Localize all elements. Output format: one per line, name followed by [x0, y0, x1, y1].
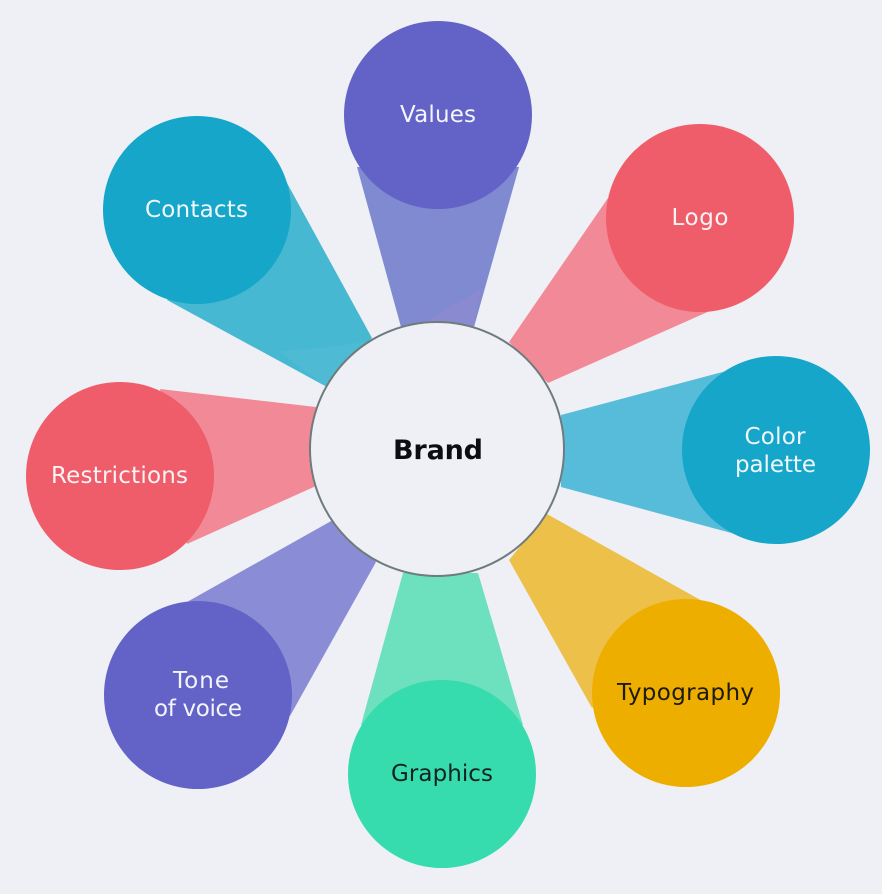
center hub: brand: [310, 322, 564, 576]
heading: brand: Brand: [393, 435, 483, 466]
circle: graphics: [348, 680, 536, 868]
circle: logo: [606, 124, 794, 312]
label: graphics: Graphics: [391, 761, 493, 787]
label: contacts: Contacts: [145, 197, 248, 223]
circle: color palette: [682, 356, 870, 544]
beam: logo: [509, 198, 712, 383]
circle: tone of voice: [104, 601, 292, 789]
beam: typography: [509, 514, 704, 708]
beam: color palette: [561, 370, 735, 534]
beam: restrictions: [160, 389, 316, 544]
label: values: Values: [400, 102, 476, 128]
label: typography: Typography: [616, 680, 754, 706]
label: tone of voice: [154, 668, 242, 722]
circle: values: [344, 21, 532, 209]
beam: values: [357, 167, 519, 327]
label: color palette: Color: [744, 424, 806, 450]
beam: tone of voice: [187, 520, 376, 716]
label: tone of voice: Tone: [172, 668, 229, 694]
circle: typography: [592, 599, 780, 787]
label: restrictions: Restrictions: [51, 463, 188, 489]
label: tone of voice: of voice: [154, 696, 242, 722]
label: logo: Logo: [672, 205, 728, 231]
beam: graphics: [361, 573, 523, 725]
circle: restrictions: [26, 382, 214, 570]
circle: contacts: [103, 116, 291, 304]
beam: contacts: [167, 183, 372, 387]
label: color palette: palette: [735, 452, 816, 478]
label: color palette: [735, 424, 816, 478]
